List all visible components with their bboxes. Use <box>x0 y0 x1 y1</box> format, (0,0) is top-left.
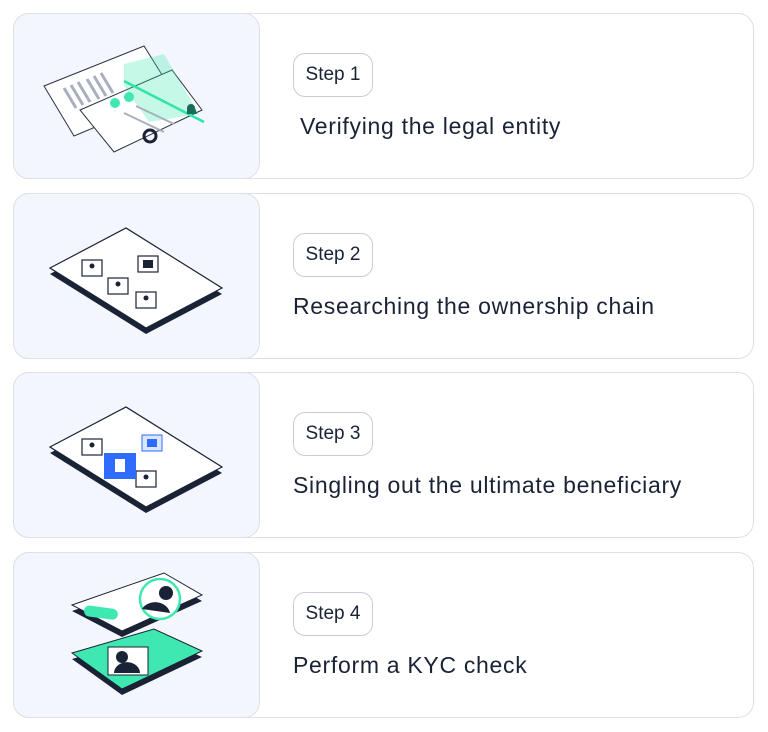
step text: Researching the ownership chain <box>293 293 655 319</box>
step text: Singling out the ultimate beneficiary <box>293 472 682 498</box>
illustration: ownership chain <box>13 193 260 359</box>
panel: step 4 <box>13 552 754 718</box>
illustration: KYC cards <box>13 552 260 718</box>
panel: step 2 <box>13 193 754 359</box>
step label <box>293 233 373 277</box>
step label: Step 4 <box>306 603 360 624</box>
panel: step 1 <box>13 13 754 179</box>
step label <box>293 592 373 636</box>
step text: Perform a KYC check <box>293 652 527 678</box>
step label: Step 2 <box>306 244 360 265</box>
step label <box>293 412 373 456</box>
panel: step 3 <box>13 372 754 538</box>
step label: Step 1 <box>306 64 360 85</box>
illustration: beneficiary <box>13 372 260 538</box>
illustration: documents <box>13 13 260 179</box>
step label: Step 3 <box>306 423 360 444</box>
step text: Verifying the legal entity <box>300 113 561 139</box>
step label <box>293 53 373 97</box>
